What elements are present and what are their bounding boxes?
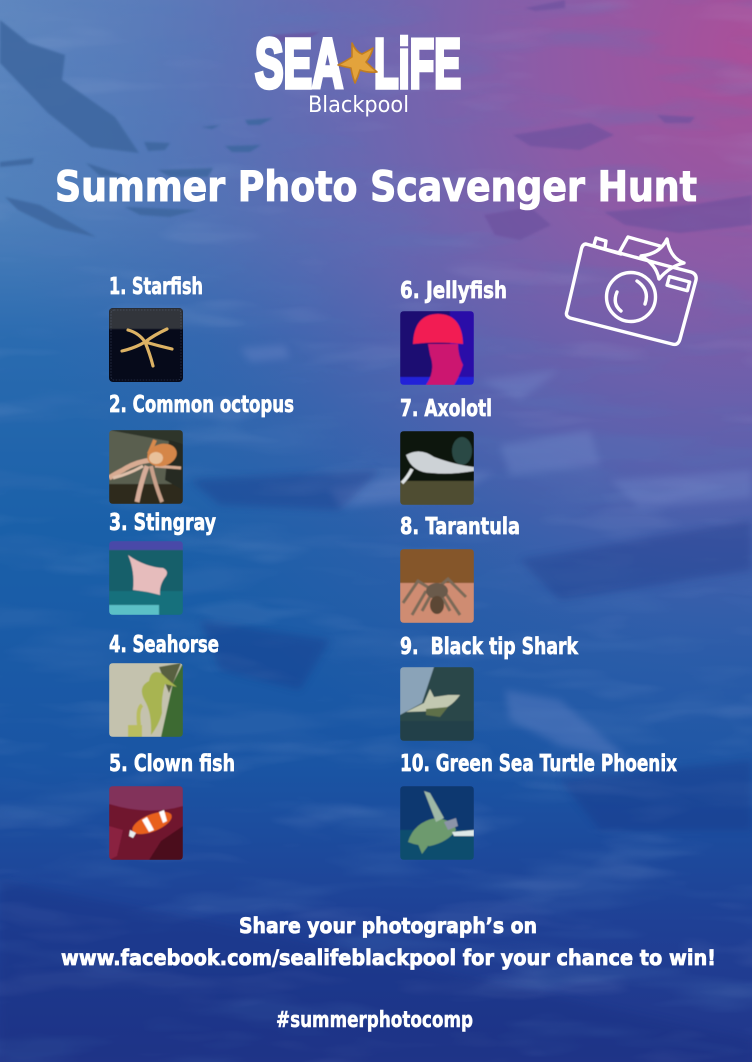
list: left column [109,274,294,860]
hashtag: #summerphotocomp [276,1008,473,1033]
photo: stingray [109,541,183,615]
item 6 label: 6. Jellyfish [400,278,507,304]
item 8 label: 8. Tarantula [400,514,520,540]
item 1 label: 1. Starfish [109,274,203,300]
logo wordmark: LiFE [374,24,461,102]
photo: jellyfish [400,311,474,385]
photo: black tip shark [400,667,474,741]
photo: green sea turtle [400,786,474,860]
photo: octopus [109,430,183,504]
item 9 label: 9. Black tip Shark [400,634,579,660]
icon: orange starfish [338,43,377,83]
photo: clown fish [109,786,183,860]
item 2 label: 2. Common octopus [109,392,294,418]
share line 1: Share your photograph’s on [239,914,537,938]
list: right column [400,278,677,860]
item 5 label: 5. Clown fish [109,751,235,777]
call to action text [61,914,716,1033]
item 3 label: 3. Stingray [109,510,216,536]
photo: starfish [109,308,183,382]
logo wordmark [255,24,461,102]
logo subtitle: Blackpool [308,93,409,118]
item 7 label: 7. Axolotl [400,396,492,422]
photo: seahorse [109,663,183,737]
icon: camera [566,237,696,344]
logo wordmark: SEA [255,24,343,102]
item 4 label: 4. Seahorse [109,632,219,658]
logo: SEA LIFE Blackpool [255,24,461,118]
photo: tarantula [400,549,474,623]
photo: axolotl [400,431,474,505]
